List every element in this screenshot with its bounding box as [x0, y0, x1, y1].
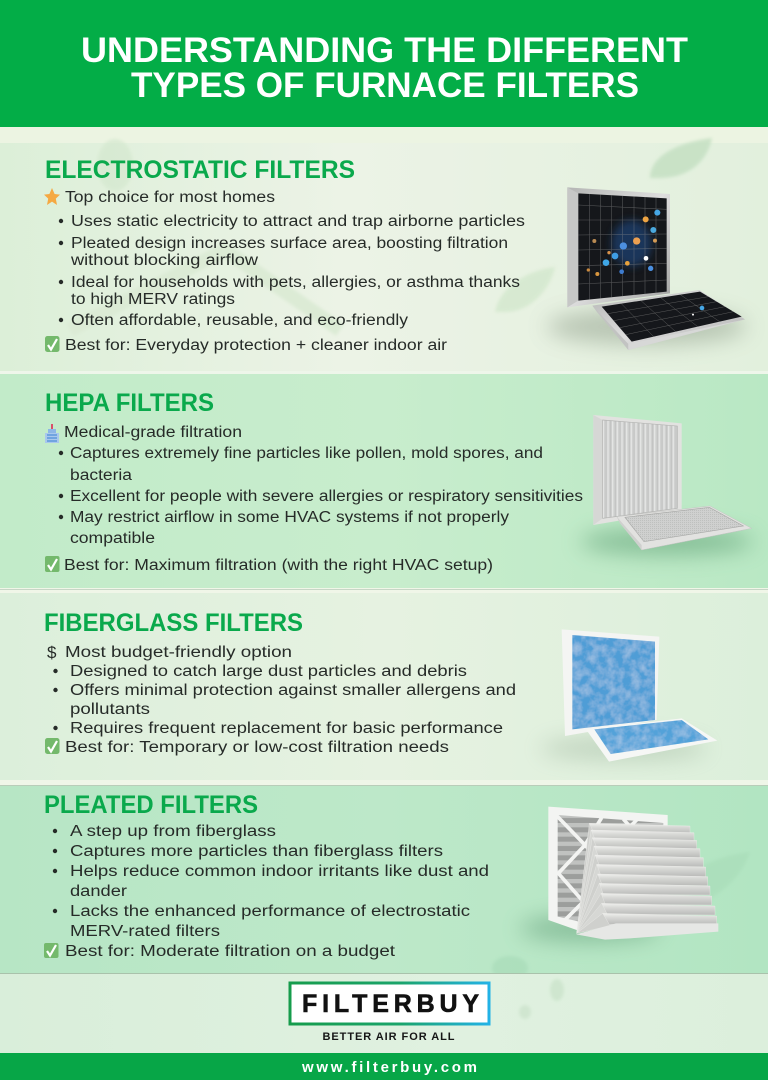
panel: top band — [0, 127, 768, 143]
icon: check — [45, 556, 60, 572]
panel: divider strip — [0, 780, 768, 786]
bullet list: Often affordable, reusable, and eco-friendly — [71, 312, 408, 329]
heading: FIBERGLASS FILTERS — [44, 609, 303, 637]
panel: divider strip — [0, 371, 768, 374]
panel: fiberglass filters — [0, 593, 768, 780]
bullet list: Uses static electricity to attract and trap airborne particles — [71, 213, 525, 230]
bullet list: compatible — [70, 530, 155, 547]
panel: footer background — [0, 973, 768, 1053]
bullet list: Captures more particles than fiberglass filters — [70, 843, 443, 860]
heading: ELECTROSTATIC FILTERS — [45, 156, 355, 184]
heading: PLEATED FILTERS — [44, 791, 258, 819]
icon: check — [45, 738, 60, 754]
best for: Best for: Temporary or low-cost filtration needs — [65, 739, 449, 756]
best for: Best for: Moderate filtration on a budget — [65, 943, 396, 960]
best for: Best for: Maximum filtration (with the right HVAC setup) — [64, 557, 493, 574]
bullet list: pollutants — [70, 701, 150, 718]
best for: Best for: Everyday protection + cleaner indoor air — [65, 337, 447, 354]
bullet list: bacteria — [70, 467, 132, 484]
bullet list: Pleated design increases surface area, boosting filtration — [71, 235, 508, 252]
icon: hospital — [45, 424, 59, 443]
bullet list: May restrict airflow in some HVAC systems if not properly — [70, 509, 509, 526]
image: pleated filter — [520, 807, 718, 942]
bullet list — [59, 213, 525, 329]
bullet list: Excellent for people with severe allergies or respiratory sensitivities — [70, 488, 583, 505]
bullet list: without blocking airflow — [70, 252, 259, 269]
panel: pleated filters — [0, 786, 768, 980]
icon: dollar: $ — [47, 643, 57, 662]
bullet list: Lacks the enhanced performance of electrostatic — [70, 903, 470, 920]
title banner: TYPES OF FURNACE FILTERS — [131, 66, 639, 105]
icon: check — [44, 943, 58, 958]
tagline: Most budget-friendly option — [65, 644, 292, 661]
tagline: Medical-grade filtration — [64, 424, 242, 441]
bullet list: Requires frequent replacement for basic performance — [70, 720, 503, 737]
panel: divider strip — [0, 588, 768, 593]
bullet list — [59, 445, 583, 547]
bullet list: Designed to catch large dust particles and debris — [70, 663, 467, 680]
bullet list — [53, 663, 516, 737]
bullet list: Captures extremely fine particles like pollen, mold spores, and — [70, 445, 543, 462]
image: electrostatic filter — [547, 187, 747, 350]
image: hepa filter — [580, 415, 753, 555]
bullet list: dander — [70, 883, 127, 900]
footer url bar — [0, 1053, 768, 1080]
footer url bar: www.filterbuy.com — [301, 1059, 477, 1076]
bullet list: Ideal for households with pets, allergies, or asthma thanks — [71, 274, 520, 291]
bullet list — [53, 823, 489, 940]
tagline: Top choice for most homes — [65, 189, 275, 206]
icon: check — [45, 336, 60, 352]
image: fiberglass filter — [540, 629, 717, 762]
bullet list: to high MERV ratings — [71, 291, 235, 308]
bullet list: Helps reduce common indoor irritants like dust and — [70, 863, 489, 880]
bullet list: Offers minimal protection against smaller allergens and — [70, 682, 516, 699]
icon: star — [44, 188, 60, 205]
title banner: UNDERSTANDING THE DIFFERENT — [81, 31, 688, 70]
panel: hepa filters — [0, 374, 768, 588]
bullet list: MERV-rated filters — [70, 923, 220, 940]
logo — [290, 983, 489, 1043]
heading: HEPA FILTERS — [45, 389, 214, 417]
logo: FILTERBUY — [302, 990, 479, 1018]
bullet list: A step up from fiberglass — [70, 823, 276, 840]
title banner — [0, 0, 768, 127]
panel: electrostatic filters — [0, 138, 768, 371]
logo: BETTER AIR FOR ALL — [322, 1031, 455, 1043]
